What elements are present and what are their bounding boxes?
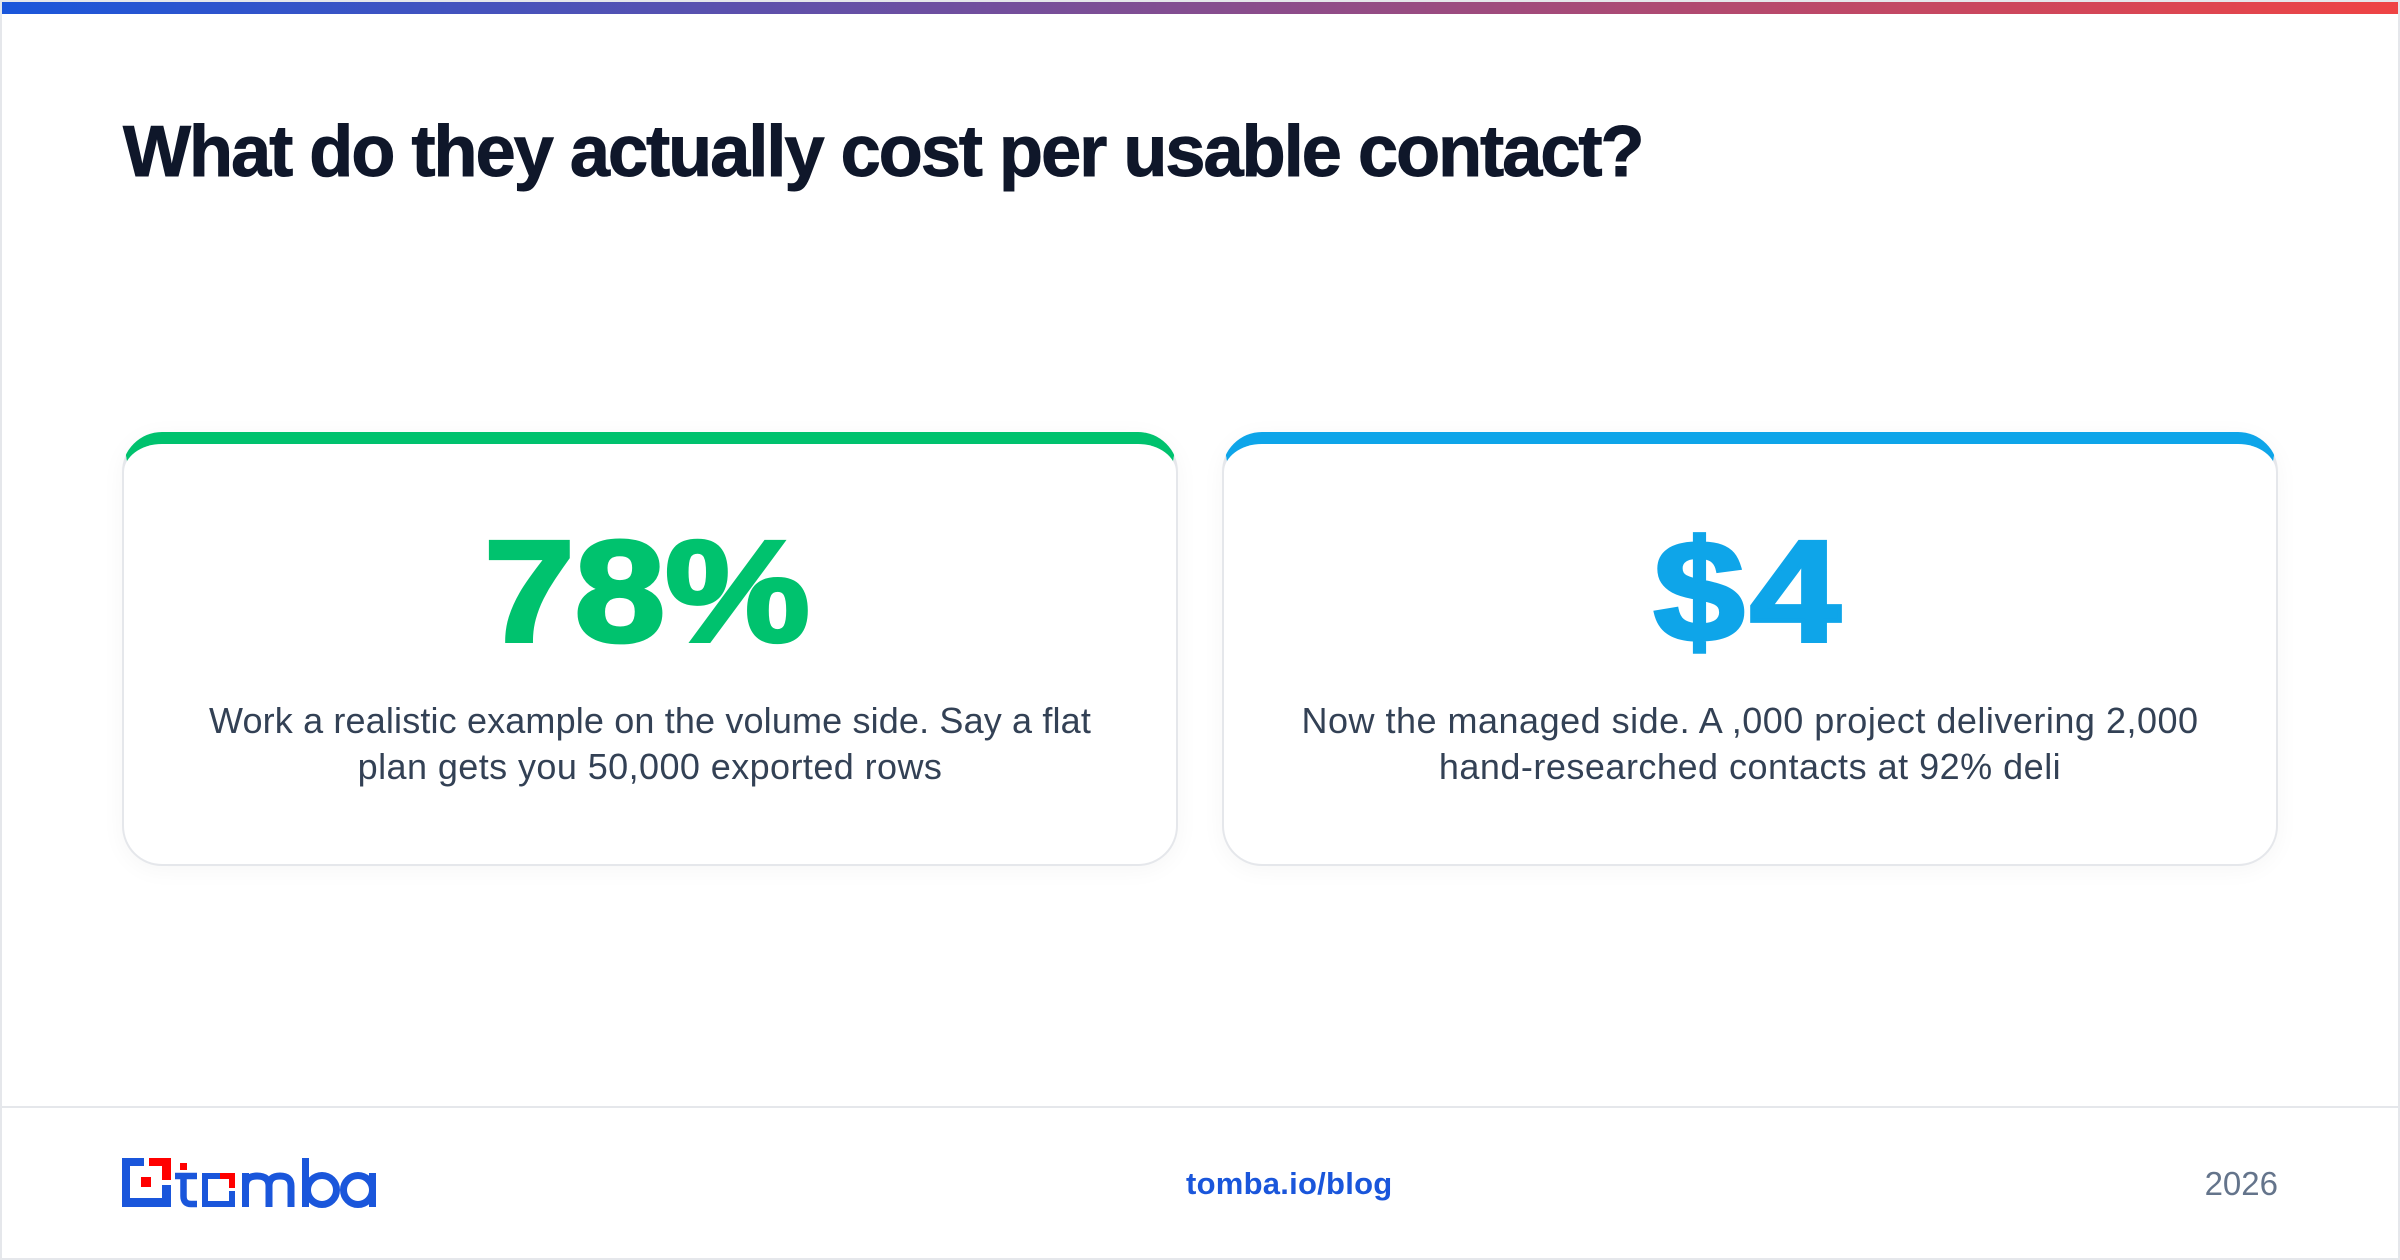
panel: managed side card — [1222, 432, 2278, 866]
description: volume side — [209, 700, 1091, 787]
big stat: 78%: 78% — [484, 511, 810, 672]
description: volume side: Work a realistic example on the volume side. Say a flat — [209, 700, 1091, 741]
description: managed side: Now the managed side. A ,000 project delivering 2,000 — [1301, 700, 2199, 741]
footer link: tomba.io/blog — [1186, 1166, 1392, 1201]
footer year: 2026 — [2205, 1165, 2278, 1202]
gradient top bar — [2, 2, 2398, 14]
description: managed side — [1301, 700, 2199, 787]
title: What do they actually cost per usable contact? — [123, 112, 1643, 192]
description: volume side: plan gets you 50,000 exported rows — [358, 746, 942, 787]
panel: volume side card — [122, 432, 1178, 866]
big stat: $4: $4 — [1654, 511, 1846, 672]
logo: tomba — [122, 1158, 376, 1208]
description: managed side: hand-researched contacts at 92% deli — [1439, 746, 2061, 787]
